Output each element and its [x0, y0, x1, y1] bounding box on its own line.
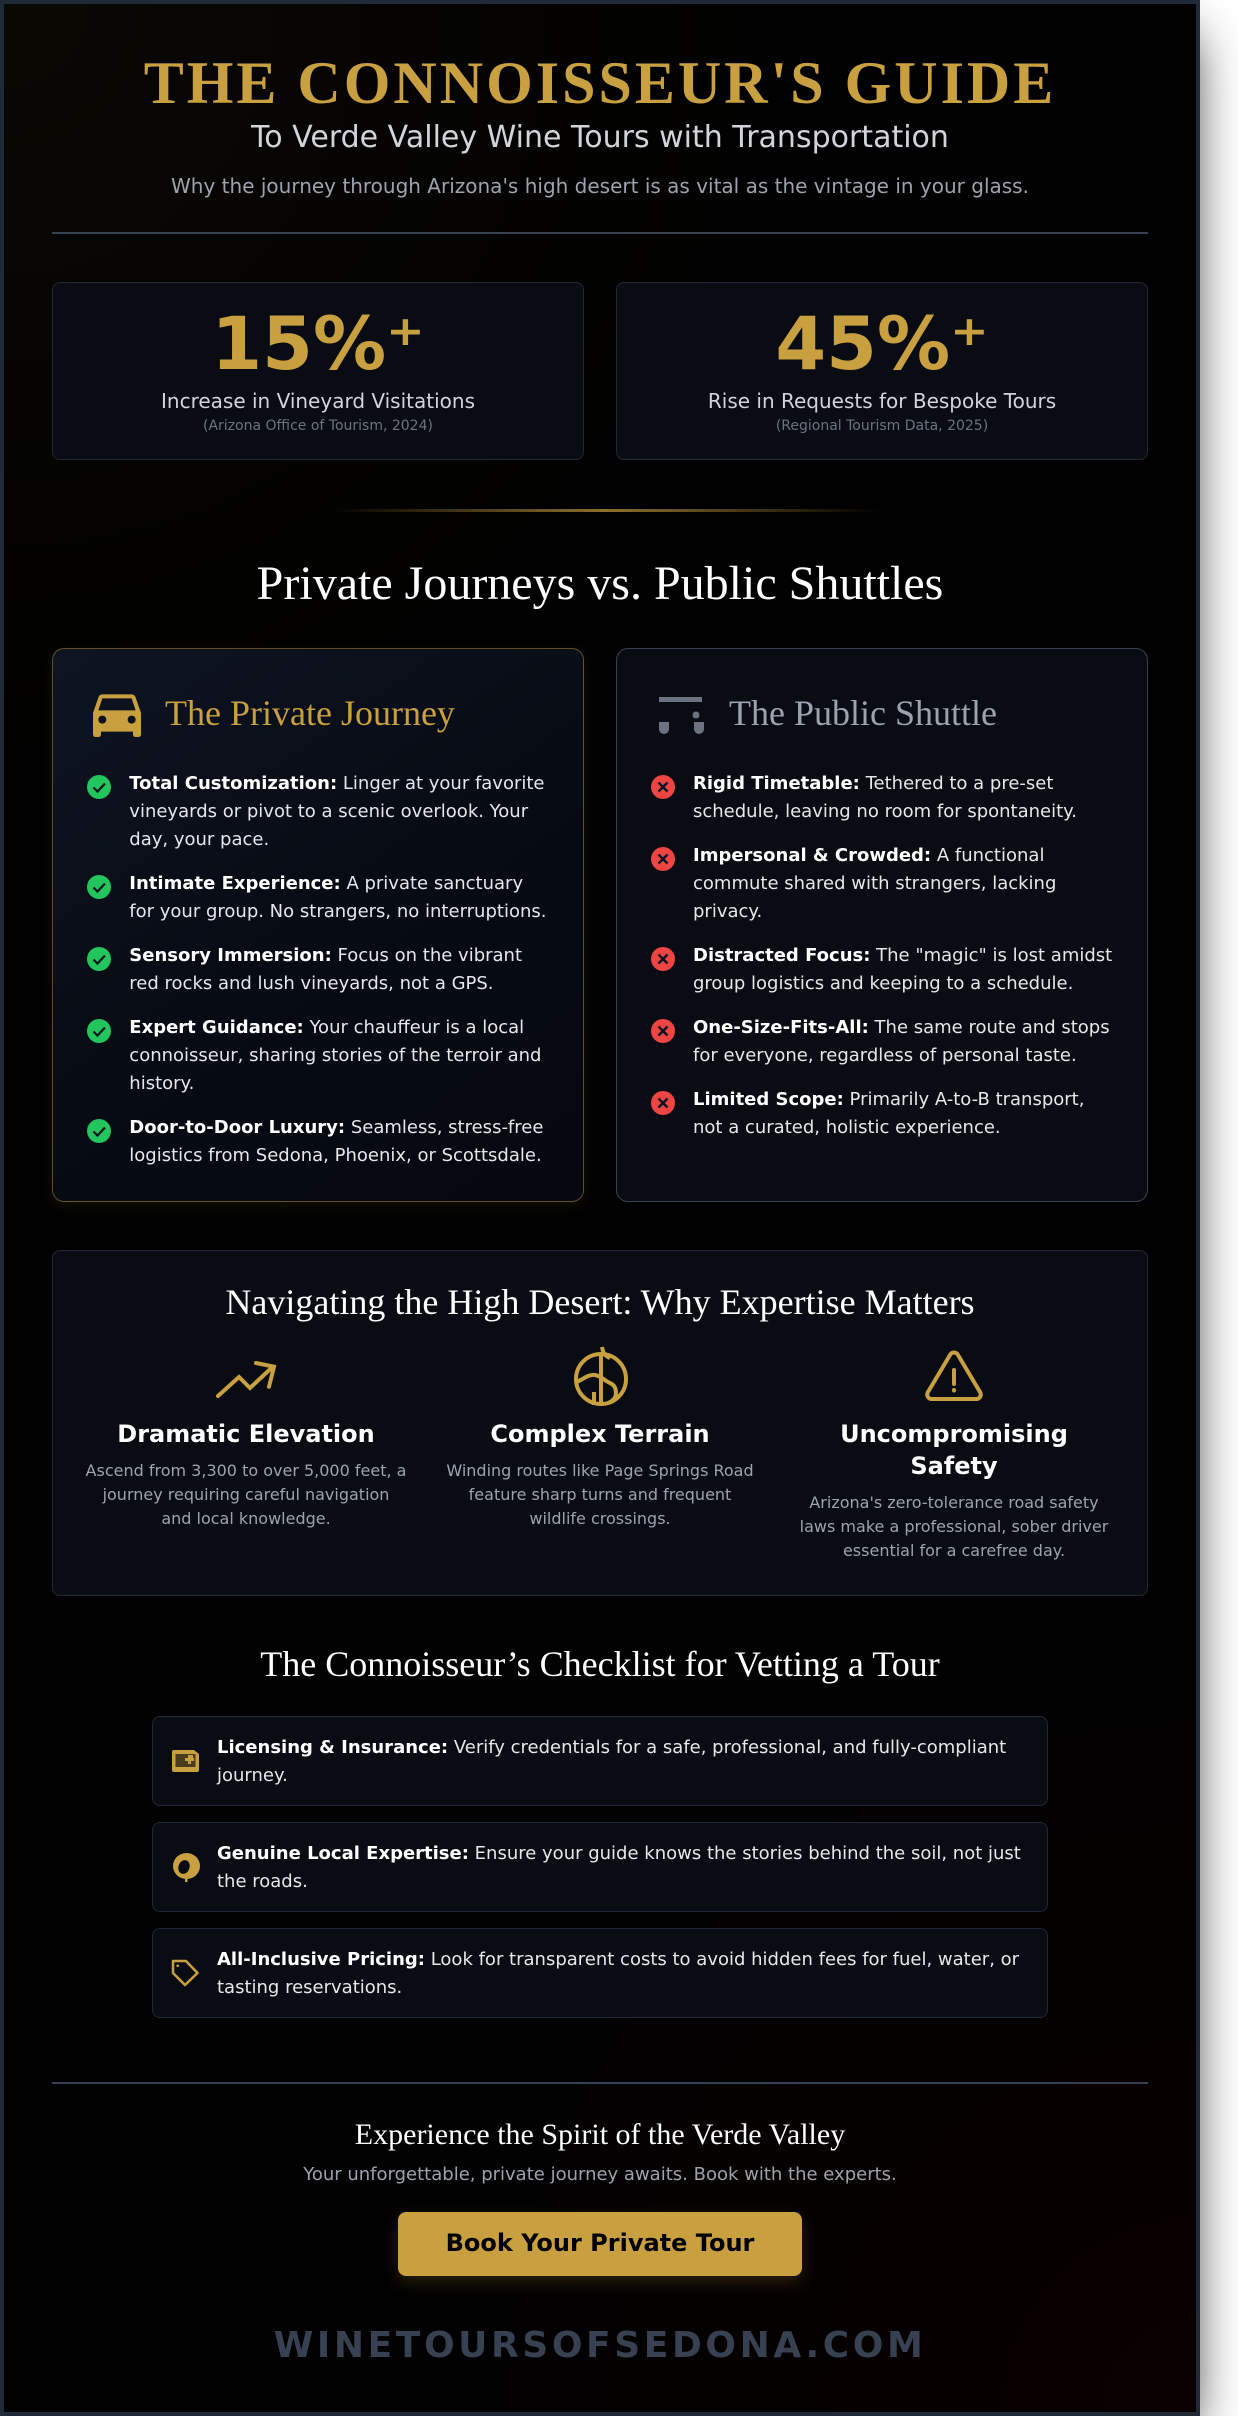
stat label: Increase in Vineyard Visitations	[161, 389, 475, 413]
text: luxury	[129, 1117, 543, 1166]
section heading: Navigating the High Desert: Why Expertise Matters	[225, 1282, 975, 1322]
text: customization	[129, 773, 545, 850]
text: guidance: Expert Guidance: Your chauffeur is a local	[129, 1017, 524, 1038]
text: crowded	[693, 845, 1056, 922]
icon: license	[172, 1750, 199, 1772]
icon: car	[93, 694, 141, 737]
footer text: Your unforgettable, private journey awaits. Book with the experts.	[303, 2164, 897, 2185]
text: sensory	[129, 945, 522, 994]
text: expertise: Genuine Local Expertise: Ensure your guide knows the stories behind the soil, not just	[217, 1843, 1021, 1864]
text: crowded: commute shared with strangers, lacking	[693, 873, 1056, 894]
check item: guidance	[87, 1019, 111, 1043]
text: luxury: Door-to-Door Luxury: Seamless, stress-free	[129, 1117, 543, 1138]
text: focus: Distracted Focus: The "magic" is lost amidst	[693, 945, 1112, 966]
text: licensing: Licensing & Insurance: Verify credentials for a safe, professional, and fully-compliant	[217, 1737, 1006, 1758]
stat value: 45%⁺	[775, 302, 989, 387]
column heading: Dramatic Elevation	[117, 1420, 375, 1448]
column text: Ascend from 3,300 to over 5,000 feet, a	[86, 1461, 406, 1480]
cross item: focus	[651, 947, 675, 971]
column heading: Uncompromising	[840, 1420, 1068, 1448]
text: pricing	[217, 1949, 1020, 1998]
text: sensory: Sensory Immersion: Focus on the vibrant	[129, 945, 522, 966]
column text	[86, 1461, 406, 1528]
text: expertise: the roads.	[217, 1871, 308, 1892]
check item: sensory	[87, 947, 111, 971]
column: terrain	[446, 1346, 754, 1528]
cross item: scope	[651, 1091, 675, 1115]
website wordmark: WINETOURSOFSEDONA.COM	[274, 2325, 926, 2366]
text: intimate: Intimate Experience: A private sanctuary	[129, 873, 523, 894]
column heading	[840, 1420, 1068, 1480]
column heading: Safety	[910, 1452, 998, 1480]
text: sensory: red rocks and lush vineyards, not a GPS.	[129, 973, 494, 994]
tagline: Why the journey through Arizona's high desert is as vital as the vintage in your glass.	[171, 174, 1029, 198]
panel: high desert	[52, 1250, 1148, 1596]
text: licensing	[216, 1737, 1006, 1786]
text: crowded: privacy.	[693, 901, 762, 922]
text: intimate	[129, 873, 546, 922]
column text: laws make a professional, sober driver	[800, 1517, 1108, 1536]
text: one-size	[693, 1017, 1110, 1066]
cross item: timetable	[651, 775, 675, 799]
cross item: crowded	[651, 847, 675, 871]
column text: Winding routes like Page Springs Road	[446, 1461, 754, 1480]
text: customization: vineyards or pivot to a scenic overlook. Your	[129, 801, 528, 822]
column text: wildlife crossings.	[529, 1509, 671, 1528]
cross item: one-size	[651, 1019, 675, 1043]
column text	[446, 1461, 754, 1528]
text: guidance: history.	[129, 1073, 194, 1094]
check item: intimate	[87, 875, 111, 899]
check item: luxury	[87, 1119, 111, 1143]
text: customization: Total Customization: Linger at your favorite	[129, 773, 545, 794]
comparison heading: Private Journeys vs. Public Shuttles	[257, 557, 943, 610]
text: pricing: tasting reservations.	[217, 1977, 402, 1998]
text: customization: day, your pace.	[129, 829, 269, 850]
column text: journey requiring careful navigation	[103, 1485, 389, 1504]
footer heading: Experience the Spirit of the Verde Valley	[355, 2118, 845, 2151]
text: expertise	[217, 1843, 1021, 1892]
icon: price tag	[172, 1960, 199, 1986]
column text: essential for a carefree day.	[843, 1541, 1065, 1560]
column text	[800, 1493, 1108, 1560]
text: guidance: connoisseur, sharing stories of the terroir and	[129, 1045, 541, 1066]
call to action button: Book Your Private Tour	[446, 2229, 754, 2257]
text: guidance	[129, 1017, 541, 1094]
stat source: (Arizona Office of Tourism, 2024)	[203, 418, 433, 434]
check item: customization	[87, 775, 111, 799]
column: elevation	[86, 1361, 406, 1528]
icon: shuttle	[659, 697, 704, 734]
text: one-size: One-Size-Fits-All: The same route and stops	[693, 1017, 1110, 1038]
panel: private journey	[52, 648, 584, 1202]
stat card: 15%	[52, 282, 584, 460]
column text: and local knowledge.	[161, 1509, 331, 1528]
checklist row: pricing	[152, 1928, 1048, 2018]
text: scope	[693, 1089, 1084, 1138]
column: safety	[800, 1350, 1108, 1560]
column heading: Complex Terrain	[490, 1420, 710, 1448]
text: timetable: schedule, leaving no room for spontaneity.	[693, 801, 1077, 822]
icon: warning	[925, 1350, 983, 1401]
text: pricing: All-Inclusive Pricing: Look for transparent costs to avoid hidden fees for fuel, water, or	[217, 1949, 1019, 1970]
stat label: Rise in Requests for Bespoke Tours	[708, 389, 1056, 413]
text: scope: not a curated, holistic experience.	[693, 1117, 1001, 1138]
subtitle: To Verde Valley Wine Tours with Transportation	[251, 120, 949, 155]
text: timetable	[693, 773, 1077, 822]
column text: feature sharp turns and frequent	[469, 1485, 731, 1504]
checklist row: licensing	[152, 1716, 1048, 1806]
text: one-size: for everyone, regardless of personal taste.	[693, 1045, 1077, 1066]
text: crowded: Impersonal & Crowded: A functional	[693, 845, 1044, 866]
stat source: (Regional Tourism Data, 2025)	[776, 418, 988, 434]
call to action button	[398, 2212, 802, 2276]
text: focus	[693, 945, 1112, 994]
column text: Arizona's zero-tolerance road safety	[809, 1493, 1099, 1512]
checklist heading: The Connoisseur’s Checklist for Vetting a Tour	[260, 1644, 940, 1684]
panel heading: The Private Journey	[165, 693, 455, 733]
text: focus: group logistics and keeping to a schedule.	[693, 973, 1073, 994]
panel: public shuttle	[616, 648, 1148, 1202]
icon: terrain	[574, 1346, 628, 1406]
text: scope: Limited Scope: Primarily A-to-B transport,	[693, 1089, 1084, 1110]
text: licensing: journey.	[217, 1765, 288, 1786]
stat card: 45%	[616, 282, 1148, 460]
checklist row: expertise	[152, 1822, 1048, 1912]
icon: trend arrow	[216, 1361, 276, 1398]
panel heading: The Public Shuttle	[729, 693, 997, 733]
text: timetable: Rigid Timetable: Tethered to a pre-set	[693, 773, 1053, 794]
text: luxury: logistics from Sedona, Phoenix, or Scottsdale.	[129, 1145, 542, 1166]
text: intimate: for your group. No strangers, no interruptions.	[129, 901, 546, 922]
icon: location bubble	[173, 1853, 200, 1882]
title: THE CONNOISSEUR'S GUIDE	[144, 50, 1056, 116]
stat value: 15%⁺	[211, 302, 425, 387]
